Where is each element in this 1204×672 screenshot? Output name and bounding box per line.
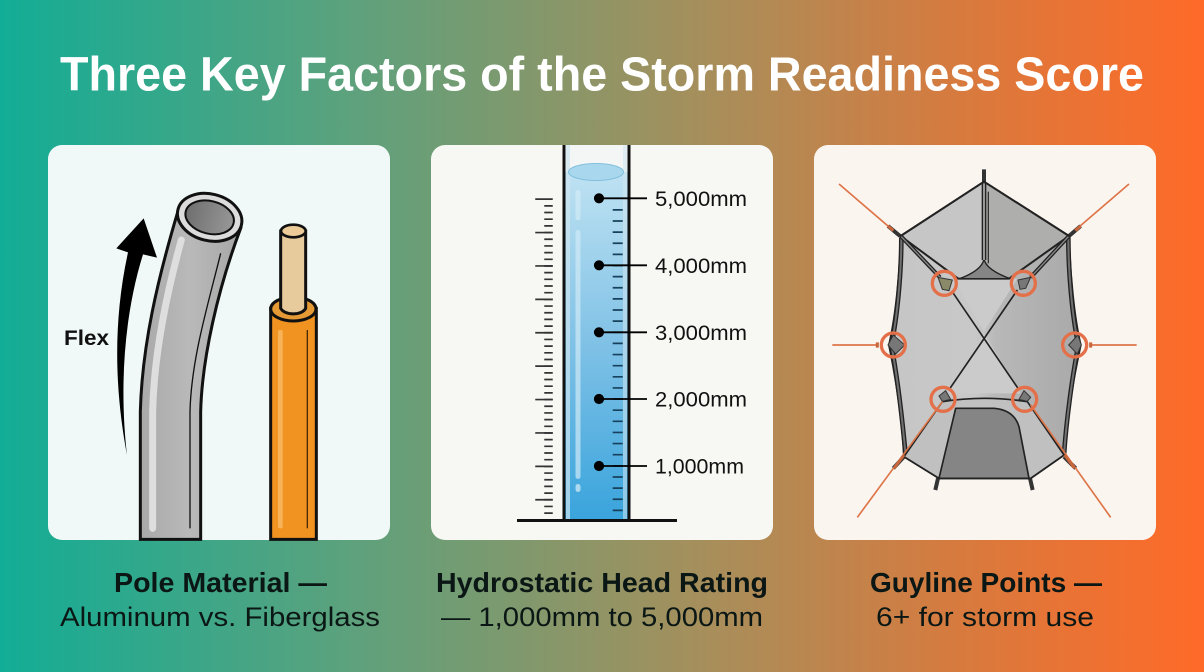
aluminum pole (140, 187, 247, 539)
tent body (889, 182, 1081, 478)
corner straps (901, 237, 1068, 277)
caption: hydrostatic head (436, 567, 768, 632)
chart: graduated cylinder (517, 145, 747, 520)
side pole bands (891, 237, 1078, 455)
roof panels (901, 182, 984, 279)
front vestibule (904, 398, 1064, 478)
water column (565, 172, 628, 520)
caption: hydrostatic head: Hydrostatic Head Rating (436, 567, 768, 598)
flex label: Flex (64, 327, 109, 350)
panel: hydrostatic head (431, 145, 773, 540)
level labels: 4,000mm (655, 254, 747, 278)
arrow: flex (116, 218, 157, 455)
left scale minor ticks (544, 205, 553, 517)
icon: pole illustrations (116, 187, 316, 539)
door (939, 408, 1029, 478)
level labels: 1,000mm (655, 454, 744, 478)
level labels (655, 187, 747, 478)
inner scale ticks (613, 209, 623, 514)
icon: tent with guylines (832, 169, 1137, 517)
panel: pole material (48, 145, 390, 540)
level markers (594, 194, 647, 471)
base line (517, 519, 677, 522)
title: Three Key Factors of the Storm Readiness Score (60, 48, 1144, 102)
guyline tensioners (877, 226, 1091, 468)
level labels: 3,000mm (655, 321, 747, 345)
attachment patches (888, 277, 1081, 401)
tube walls (564, 145, 629, 520)
level labels: 2,000mm (655, 388, 747, 412)
guylines (832, 184, 1137, 517)
caption: pole material (60, 567, 380, 632)
centre body panels (949, 279, 1021, 393)
caption: guyline points: 6+ for storm use (876, 602, 1094, 632)
caption: guyline points (870, 567, 1103, 632)
centre roof seam (977, 183, 991, 260)
tent poles (888, 169, 1081, 490)
caption: pole material: Pole Material — (114, 567, 328, 598)
level labels: 5,000mm (655, 187, 747, 211)
caption: guyline points: Guyline Points — (870, 567, 1103, 598)
crossed straps (950, 290, 1018, 388)
caption: pole material: Aluminum vs. Fiberglass (60, 602, 380, 632)
highlight circles (881, 271, 1087, 411)
left scale major ticks (535, 198, 553, 510)
fiberglass pole (271, 225, 316, 539)
caption: hydrostatic head: — 1,000mm to 5,000mm (441, 602, 763, 632)
panel: guyline points (814, 145, 1156, 540)
glass wall (565, 145, 628, 175)
